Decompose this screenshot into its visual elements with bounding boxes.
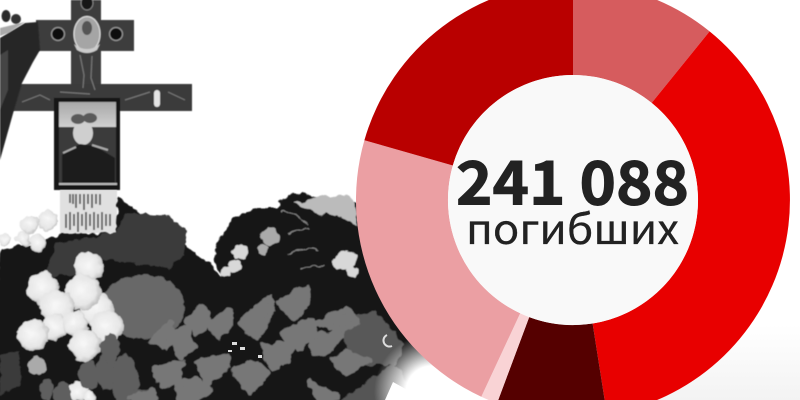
white roses <box>0 210 124 400</box>
donut centre <box>448 75 698 325</box>
foliage and wreath group <box>0 193 440 400</box>
grey rose buds <box>40 334 157 400</box>
segment: very dark red <box>497 317 607 400</box>
cross <box>12 0 192 111</box>
wreath ribbon stripes <box>280 212 325 270</box>
segment: salmon <box>573 0 710 103</box>
bottom right background shade <box>600 325 800 400</box>
photo: grave with cross and flowers <box>0 0 440 400</box>
total figure: 241 088 <box>456 136 689 222</box>
grey textured foliage right <box>335 310 405 365</box>
segment: pink <box>356 140 520 397</box>
cloth on wreath <box>295 195 357 225</box>
white flowers on wreath <box>221 228 358 278</box>
photo fade to white <box>370 330 480 400</box>
white paper corner <box>385 382 422 400</box>
tree trunk <box>0 10 40 160</box>
name plaque <box>60 190 117 233</box>
grey foliage <box>101 275 185 339</box>
mound of dark foliage <box>45 213 187 275</box>
donut chart <box>356 0 790 400</box>
segment: dark red <box>364 0 573 166</box>
small white specks <box>228 335 392 358</box>
segment: pale pink <box>481 313 529 400</box>
portrait frame <box>54 98 120 190</box>
total label: погибших <box>466 196 679 256</box>
grey leaves <box>130 288 368 400</box>
dark foliage slab fading at right <box>335 363 425 400</box>
dark ground silhouette <box>0 193 440 400</box>
segment: bright red <box>593 31 790 400</box>
left dark foliage texture <box>0 350 22 395</box>
